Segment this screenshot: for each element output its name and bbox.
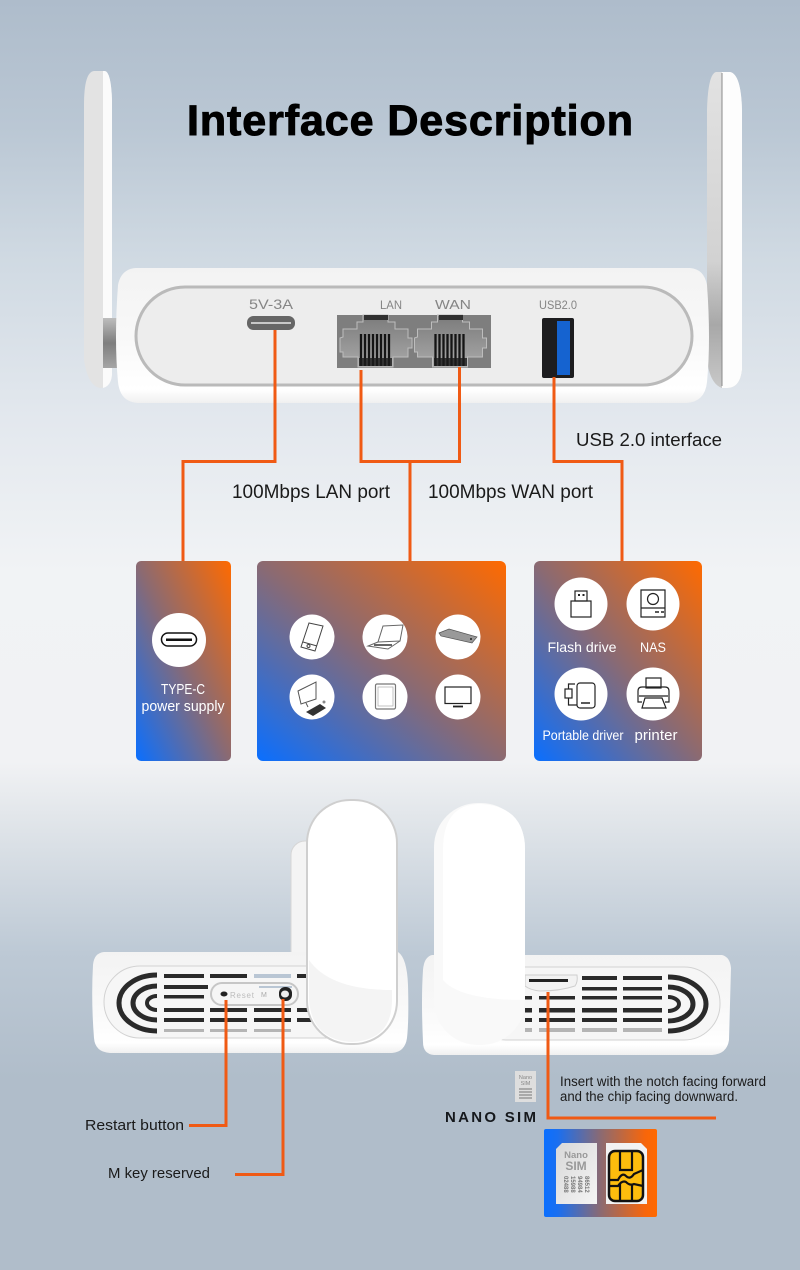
router rear panel [116,268,709,403]
instruction text: and the chip facing downward. [560,1089,738,1104]
label: 5V-3A: 5V-3A [249,297,293,312]
instruction text [560,1074,766,1104]
SIM card back: 15988 [569,1176,575,1193]
USB port [542,318,574,378]
icon: monitor [436,674,480,720]
icon: type-c [152,613,206,667]
SIM slot [525,975,577,991]
instruction text: Insert with the notch facing forward [560,1074,766,1089]
reset and M key pill: Reset [230,991,255,1000]
vents [525,976,706,1032]
front antenna [306,799,398,1045]
label: NANO SIM: NANO SIM [445,1109,536,1126]
label: Restart button: Restart button [85,1117,184,1134]
text: printer: printer [634,727,678,744]
back antenna [291,841,331,971]
panel: USB devices [534,561,702,761]
icon: desktop computer [290,674,334,720]
connector lines (bottom) [189,992,716,1174]
reset and M key pill: M [261,992,267,999]
SIM card back [556,1143,597,1204]
left antenna (top router) [84,71,117,388]
label: M key reserved: M key reserved [108,1165,210,1182]
SIM card back: 94984 [576,1176,582,1193]
small nano sim icon: SIM [521,1081,531,1087]
icon: phone [290,614,334,660]
panel: type-c power [136,561,231,761]
label: LAN: LAN [380,300,402,312]
router side body [422,955,731,1055]
label: WAN: WAN [435,297,471,312]
LAN and WAN ports [337,315,491,368]
connector lines (top) [183,330,622,561]
bottom right router [422,803,731,1055]
bottom left router [92,799,408,1053]
label: USB 2.0 interface: USB 2.0 interface [576,430,722,450]
label: LAN port: 100Mbps LAN port [232,482,391,503]
SIM card chip [606,1143,647,1204]
label: WAN port: 100Mbps WAN port [428,482,594,503]
type-c port [247,316,295,330]
icon: tablet [362,674,408,720]
text: TYPE-C: TYPE-C [161,682,205,698]
small nano sim icon [515,1071,536,1102]
SIM card back: SIM [565,1159,587,1173]
icon: portable drive [554,668,608,720]
label: USB2.0: USB2.0 [539,300,577,312]
SIM card back: Nano [564,1150,588,1161]
reset and M key pill [211,983,298,1005]
text: Flash drive: Flash drive [548,639,617,655]
router side body [92,952,408,1053]
icon: flash drive [554,578,608,630]
text: Portable driver: Portable driver [542,727,624,743]
icon: laptop [362,614,408,660]
title: Interface Description [187,97,633,145]
recessed vent area [470,967,720,1040]
panel: SIM orientation [544,1129,657,1217]
text: NAS: NAS [640,639,666,655]
icon: printer [626,668,680,720]
text: power supply: power supply [142,699,225,715]
SIM card back: 02488 [562,1176,568,1193]
right antenna (top router) [707,72,742,388]
small nano sim icon: Nano [519,1075,532,1081]
recessed vent area [104,966,394,1038]
icon: switch [436,614,480,660]
vents [119,974,312,1032]
panel: LAN devices [257,561,506,761]
SIM card back: 86512 [583,1176,589,1193]
icon: NAS [626,578,680,630]
front antenna [434,803,525,1045]
